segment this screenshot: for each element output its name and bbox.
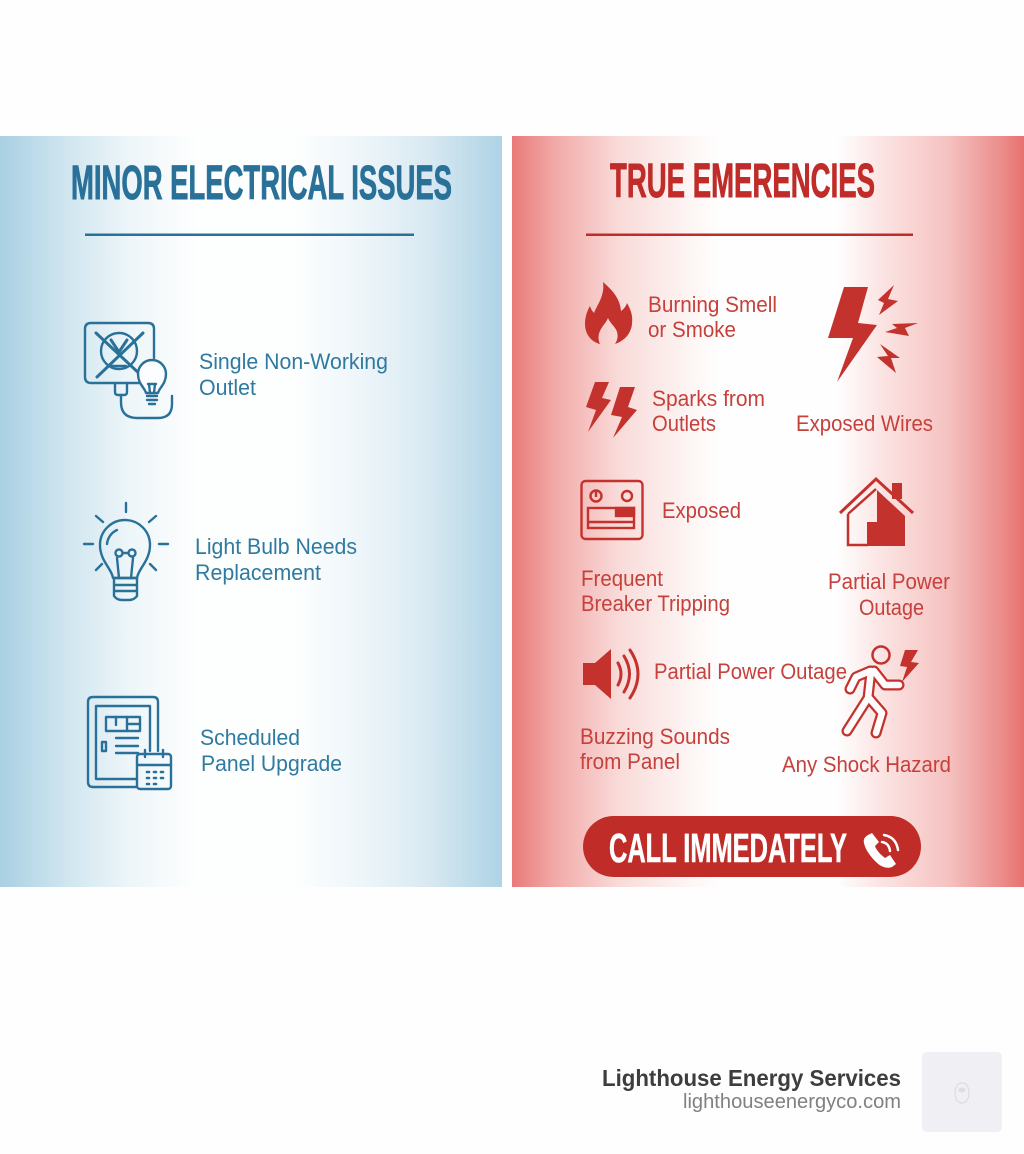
panel: minor electrical issues bbox=[0, 136, 502, 887]
label: Sparks from bbox=[652, 386, 765, 411]
icon: lightning with sparks bbox=[828, 285, 918, 382]
icon: light bulb bbox=[84, 503, 168, 600]
label: Any Shock Hazard bbox=[782, 752, 951, 777]
panel background: red bbox=[512, 136, 1024, 887]
item: light bulb needs replacement bbox=[84, 503, 357, 600]
item: any shock hazard bbox=[782, 646, 951, 777]
label: Single Non-Working bbox=[199, 349, 388, 374]
item: burning smell or smoke bbox=[585, 282, 777, 344]
heading: minor electrical issues: MINOR ELECTRICAL ISSUES bbox=[71, 157, 452, 210]
brand name: Lighthouse Energy Services bbox=[602, 1065, 901, 1091]
label: partial power outage: Partial Power Outage bbox=[654, 659, 847, 684]
label bbox=[828, 569, 950, 620]
icon: flame bbox=[585, 282, 632, 344]
icon: half-filled house bbox=[840, 479, 913, 546]
label: buzzing sounds from panel: Buzzing Sounds bbox=[580, 724, 730, 749]
item: buzzing sounds from panel bbox=[580, 649, 847, 774]
label: Outlets bbox=[652, 411, 716, 436]
icon: person shocked bbox=[847, 646, 919, 733]
label bbox=[200, 725, 342, 776]
panel background: blue bbox=[0, 136, 502, 887]
item: scheduled panel upgrade bbox=[88, 697, 342, 789]
label: frequent breaker tripping: Frequent bbox=[581, 566, 663, 591]
label: Light Bulb Needs bbox=[195, 534, 357, 559]
label: exposed: Exposed bbox=[662, 498, 741, 523]
label: Replacement bbox=[195, 560, 321, 585]
label: Exposed Wires bbox=[796, 411, 933, 436]
label bbox=[195, 534, 357, 585]
icon: crossed outlet with bulb bbox=[85, 323, 172, 418]
panel: true emergencies bbox=[512, 136, 1024, 887]
icon: speaker bbox=[583, 649, 638, 699]
icon: double bolts bbox=[586, 382, 637, 438]
label: Panel Upgrade bbox=[201, 751, 342, 776]
label bbox=[648, 292, 777, 342]
label bbox=[652, 386, 765, 436]
item: frequent breaker tripping bbox=[581, 481, 741, 616]
footer: brand bbox=[602, 1052, 1002, 1132]
label: Burning Smell bbox=[648, 292, 777, 317]
label: Outlet bbox=[199, 375, 256, 400]
icon: breaker box bbox=[582, 481, 642, 539]
label: frequent breaker tripping bbox=[581, 566, 730, 616]
label bbox=[199, 349, 388, 400]
item: single non-working outlet bbox=[85, 323, 388, 418]
label: Outage bbox=[859, 595, 924, 620]
item: exposed wires bbox=[796, 285, 933, 436]
label: buzzing sounds from panel: from Panel bbox=[580, 749, 680, 774]
label: buzzing sounds from panel bbox=[580, 724, 730, 774]
icon: phone bbox=[864, 833, 898, 868]
label: or Smoke bbox=[648, 317, 736, 342]
button: call immediately: CALL IMMEDATELY bbox=[609, 825, 847, 871]
button: call immediately bbox=[583, 816, 921, 877]
icon: panel with calendar bbox=[88, 697, 171, 789]
label: frequent breaker tripping: Breaker Tripping bbox=[581, 591, 730, 616]
label: Scheduled bbox=[200, 725, 300, 750]
brand url: lighthouseenergyco.com bbox=[683, 1091, 901, 1113]
item: sparks from outlets bbox=[586, 382, 765, 438]
item: partial power outage bbox=[828, 479, 950, 620]
logo placeholder bbox=[922, 1052, 1002, 1132]
label: Partial Power bbox=[828, 569, 950, 594]
